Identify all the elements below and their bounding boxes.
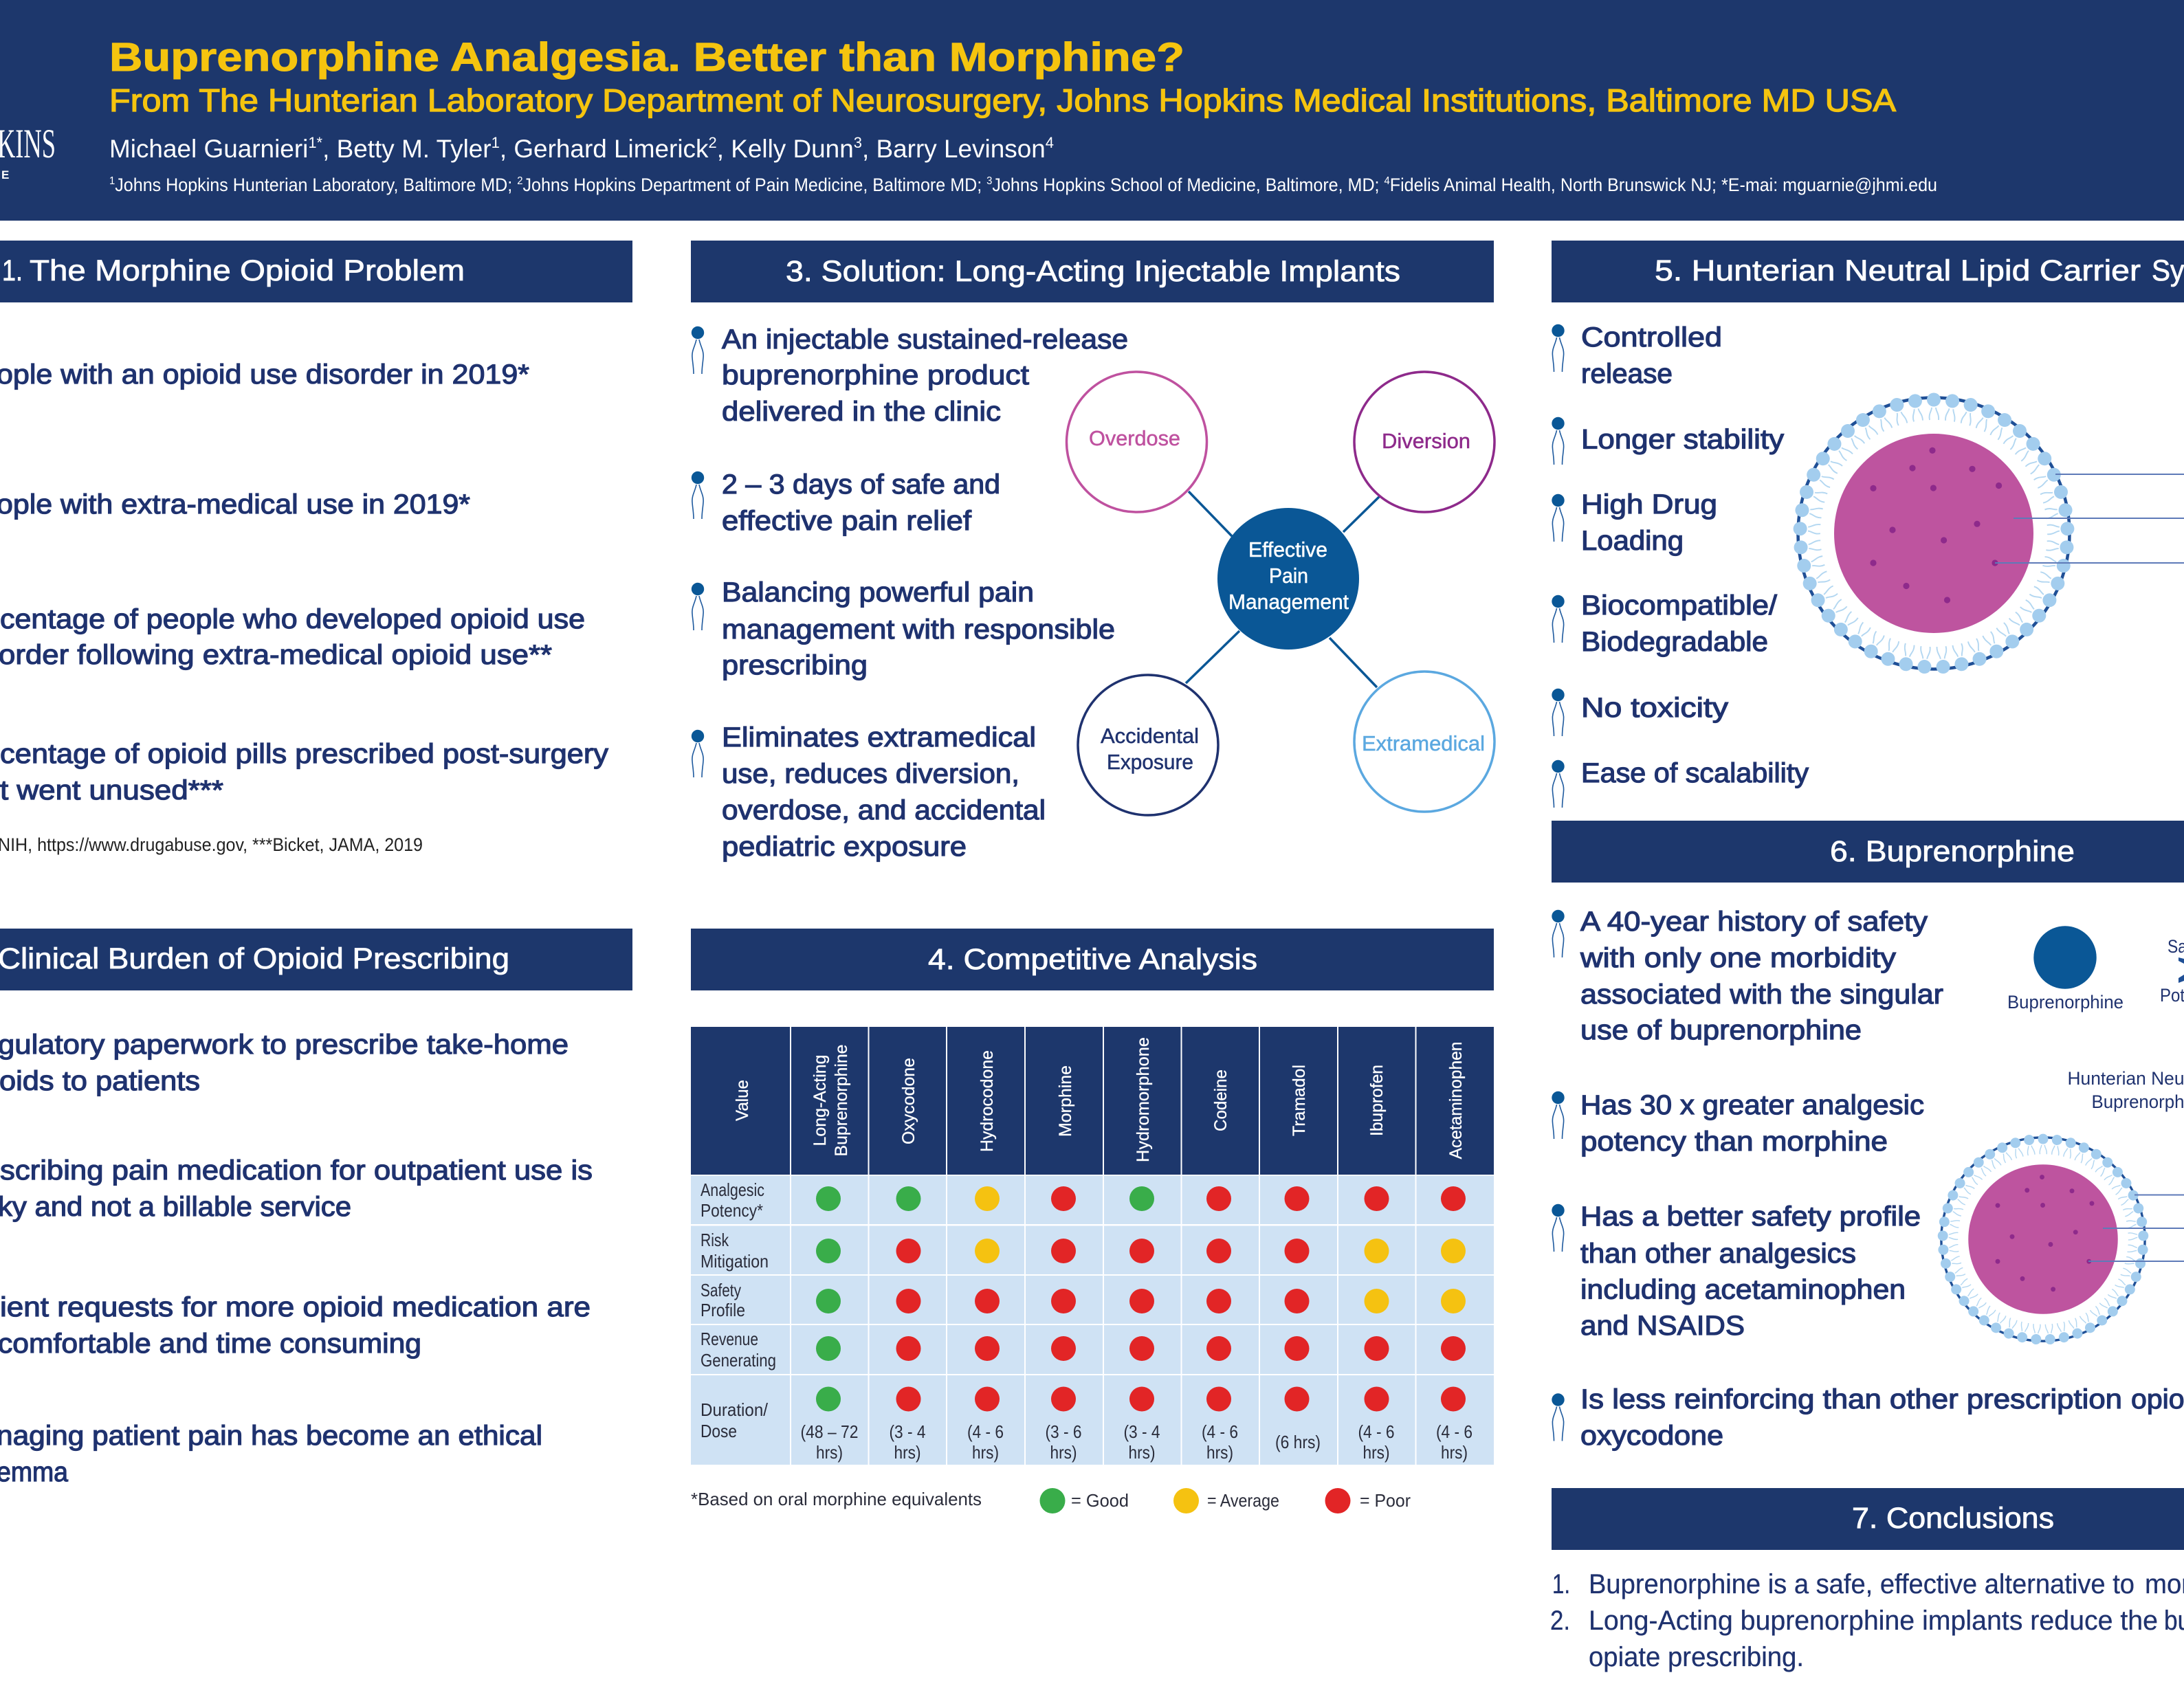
text block: sustained release: delivered in the clinic xyxy=(722,397,1001,427)
text block: section 2 burdens: naging patient pain has become an ethical xyxy=(0,1421,542,1451)
table header row: Buprenorphine xyxy=(832,1045,851,1156)
label: Buprenorphine: Buprenorphine xyxy=(2007,992,2124,1012)
icon: lipid bullet xyxy=(1552,1204,1565,1252)
heading: section 2: Clinical Burden of Opioid Prescribing xyxy=(0,942,509,975)
diagram: effective pain management hub xyxy=(1067,372,1494,815)
icon: lipid bullet xyxy=(1552,1393,1565,1441)
node: Accidental Exposure: Accidental xyxy=(1101,724,1199,748)
legend: ratings: = Average xyxy=(1207,1490,1279,1511)
icon: lipid bullet xyxy=(692,326,704,374)
text block: conclusion 2 xyxy=(1550,1606,2184,1672)
text block: eliminates extramedical use: overdose, and accidental xyxy=(722,795,1046,825)
text block: safety history: with only one morbidity xyxy=(1580,943,1896,973)
text block: section 2 burdens: ky and not a billable service xyxy=(0,1192,351,1222)
text block: safety profile: including acetaminophen xyxy=(1580,1274,1906,1305)
heading: section 5: 5. Hunterian Neutral Lipid Carrier xyxy=(1655,254,2141,287)
text block: section 2 burdens: oids to patients xyxy=(0,1066,200,1096)
text block: safety profile: than other analgesics xyxy=(1580,1239,1856,1269)
icon: buprenorphine molecule xyxy=(2033,926,2097,989)
text block: eliminates extramedical use xyxy=(722,722,1046,862)
text block: sustained release: buprenorphine product xyxy=(722,360,1029,390)
heading: section 6: 6. Buprenorphine xyxy=(1830,835,2075,868)
text block: conclusion 2: 2. xyxy=(1550,1606,1570,1636)
panel: 3. Solution: Long-Acting Injectable Implants xyxy=(691,241,1494,862)
heading: section 3: 3. Solution: Long-Acting Injectable Implants xyxy=(786,255,1400,288)
table header row: Ibuprofen xyxy=(1367,1065,1387,1136)
text block: high drug loading: High Drug xyxy=(1581,489,1717,520)
text block: safety history: A 40-year history of safety xyxy=(1580,907,1928,937)
logo: Johns Hopkins wordmark (cropped): E xyxy=(1,168,9,181)
affiliations: Fidelis Animal Health, North Brunswick NJ; *E-mai: mguarnie@jhmi.edu xyxy=(1390,175,1937,195)
icon: lipid bullet xyxy=(692,583,704,630)
panel: 5. Hunterian Neutral Lipid Carrier System xyxy=(1552,241,2184,808)
text block: safety history: use of buprenorphine xyxy=(1580,1015,1862,1045)
table header row: Morphine xyxy=(1056,1065,1075,1137)
text block: pain relief: 2 – 3 days of safe and xyxy=(722,469,1000,500)
heading: section 2 xyxy=(0,929,632,990)
row: Duration / Dose: hrs) xyxy=(1206,1442,1233,1463)
icon: lipid bullet xyxy=(1552,417,1565,465)
text block: eliminates extramedical use: pediatric exposure xyxy=(722,832,967,862)
text block: section 2 burdens: gulatory paperwork to prescribe take-home xyxy=(0,1030,569,1060)
diagram: buprenorphine lipid carrier particle xyxy=(1937,1134,2149,1345)
affiliations: Johns Hopkins Hunterian Laboratory, Baltimore MD; xyxy=(115,175,517,195)
panel: 2. Clinical Burden of Opioid Prescribing xyxy=(0,929,632,1487)
authors: 2 xyxy=(708,134,717,151)
heading: section 7: 7. Conclusions xyxy=(1852,1502,2054,1535)
heading: section 1 xyxy=(0,241,632,302)
row: Risk Mitigation: Risk xyxy=(701,1230,729,1250)
table header row: Hydrocodone xyxy=(978,1050,997,1152)
diagram: lipid carrier particle xyxy=(1793,393,2075,674)
row: Duration / Dose: (6 hrs) xyxy=(1275,1432,1321,1452)
authors: 3 xyxy=(854,134,862,151)
panel: 7. Conclusions xyxy=(1550,1488,2184,1672)
heading: section 1: The Morphine Opioid Problem xyxy=(30,254,465,287)
row: Analgesic Potency: Potency* xyxy=(701,1200,763,1221)
row: Duration / Dose: (4 - 6 xyxy=(967,1421,1004,1442)
text block: conclusion 1: Buprenorphine is a safe, effective alternative to xyxy=(1589,1569,2135,1599)
text block: balancing pain management: management with responsible xyxy=(722,614,1115,645)
poster header band xyxy=(0,0,2184,221)
row: Duration / Dose: hrs) xyxy=(972,1442,999,1463)
text block: section 1 statistics: order following extra-medical opioid use** xyxy=(0,640,552,670)
node: Extramedical xyxy=(1354,672,1494,812)
row: Safety Profile: Safety xyxy=(701,1280,741,1300)
text block: section 2 burdens: comfortable and time consuming xyxy=(0,1329,421,1359)
text block: section 2 burdens: scribing pain medication for outpatient use is xyxy=(0,1155,593,1186)
text block: analgesic potency: potency than morphine xyxy=(1580,1127,1888,1157)
authors: , Barry Levinson xyxy=(862,135,1046,163)
row: Revenue Generating: Generating xyxy=(701,1350,776,1371)
row: Duration / Dose: (4 - 6 xyxy=(1358,1421,1394,1442)
row: Analgesic Potency: Analgesic xyxy=(701,1179,764,1200)
heading: section 5 xyxy=(1552,241,2184,302)
text block: high drug loading xyxy=(1581,489,1717,556)
text block: biocompatible: Biocompatible/ xyxy=(1581,590,1778,621)
text block: section 1 statistics xyxy=(0,359,608,806)
row: Duration / Dose: (4 - 6 xyxy=(1436,1421,1472,1442)
authors: 1* xyxy=(308,134,323,151)
icon: lipid bullet xyxy=(1552,910,1565,957)
heading: section 6 xyxy=(1552,821,2184,883)
icon: lipid bullet xyxy=(692,730,704,777)
table header row: Tramadol xyxy=(1290,1065,1309,1136)
text block: safety history xyxy=(1580,907,1943,1045)
row: Duration / Dose: hrs) xyxy=(1441,1442,1468,1463)
panel: 6. Buprenorphine xyxy=(1552,821,2184,1451)
text block: section 1 references: NIH, https://www.drugabuse.gov, ***Bicket, JAMA, 2019 xyxy=(0,834,423,855)
node: Overdose: Overdose xyxy=(1089,426,1180,450)
text block: controlled release: release xyxy=(1581,359,1673,389)
table header row: Value xyxy=(733,1080,752,1121)
icon: lipid bullet xyxy=(1552,1091,1565,1139)
row: Duration / Dose: hrs) xyxy=(1129,1442,1155,1463)
icon: lipid bullet xyxy=(1552,689,1565,736)
text block: conclusion 1: 1. xyxy=(1552,1569,1570,1599)
row: Duration / Dose: (3 - 4 xyxy=(890,1421,925,1442)
heading: section 4: 4. Competitive Analysis xyxy=(928,943,1257,976)
authors: 4 xyxy=(1046,134,1054,151)
label: safety and potency arrows (cropped) xyxy=(2160,936,2184,1006)
text block: section 2 burdens xyxy=(0,1030,593,1487)
node: Effective Pain Management: Management xyxy=(1228,590,1349,614)
subtitle: From The Hunterian Laboratory Department of Neurosurgery, Johns Hopkins Medical Institutions, Baltimore MD USA xyxy=(109,82,1896,118)
affiliations: 3 xyxy=(986,175,993,187)
text block: safety profile: Has a better safety profile xyxy=(1580,1201,1921,1232)
text block: section 2 burdens: ient requests for more opioid medication are xyxy=(0,1292,591,1322)
text block: eliminates extramedical use: use, reduces diversion, xyxy=(722,759,1019,789)
heading: section 1: 1. xyxy=(2,254,23,287)
node: Effective Pain Management: Effective xyxy=(1248,537,1327,562)
authors: Michael Guarnieri xyxy=(109,135,309,163)
leader lines: lipid carrier callouts xyxy=(1995,474,2184,563)
row: Safety Profile: Profile xyxy=(701,1300,745,1320)
label: Hunterian Neutral carrier with buprenorphine: Hunterian Neu xyxy=(2068,1068,2184,1089)
node: Extramedical: Extramedical xyxy=(1362,731,1485,755)
row: Duration / Dose xyxy=(691,1375,1494,1465)
row: Duration / Dose: (3 - 4 xyxy=(1123,1421,1160,1442)
row: Risk Mitigation: Mitigation xyxy=(701,1251,769,1272)
affiliations: 2 xyxy=(517,175,523,187)
row: Revenue Generating: Revenue xyxy=(701,1329,758,1349)
row: Duration / Dose: hrs) xyxy=(894,1442,921,1463)
text block: pain relief: effective pain relief xyxy=(722,506,972,536)
row: Analgesic Potency xyxy=(691,1175,1494,1224)
icon: lipid bullet xyxy=(1552,494,1565,542)
text block: less reinforcing xyxy=(1580,1384,2184,1451)
node: Accidental Exposure: Exposure xyxy=(1107,750,1193,774)
panel: 4. Competitive Analysis xyxy=(691,929,1494,1513)
table header row: Hydromorphone xyxy=(1134,1037,1153,1162)
title: Buprenorphine Analgesia. Better than Morphine? xyxy=(109,35,1184,80)
text: longer stability: Longer stability xyxy=(1581,425,1784,455)
text block: sustained release: An injectable sustained-release xyxy=(722,324,1128,355)
text block: biocompatible: Biodegradable xyxy=(1581,627,1768,657)
table header row: Oxycodone xyxy=(899,1058,918,1144)
row: Duration / Dose: Dose xyxy=(701,1421,737,1441)
text block: less reinforcing: oxycodone xyxy=(1580,1421,1723,1451)
affiliations: Johns Hopkins Department of Pain Medicine, Baltimore MD; xyxy=(523,175,986,195)
legend: ratings: = Good xyxy=(1071,1490,1129,1511)
leader lines: buprenorphine carrier callouts xyxy=(2088,1195,2184,1261)
panel: 1. The Morphine Opioid Problem xyxy=(0,241,632,855)
text block: controlled release xyxy=(1581,322,1722,389)
text block: conclusion 2: opiate prescribing. xyxy=(1589,1642,1804,1672)
heading: section 3 xyxy=(691,241,1494,302)
row: Safety Profile xyxy=(691,1276,1494,1324)
text: ease of scalability: Ease of scalability xyxy=(1581,758,1809,788)
text block: section 1 statistics: t went unused*** xyxy=(0,775,223,806)
text block: conclusion 2: Long-Acting buprenorphine implants reduce the xyxy=(1589,1606,2158,1636)
row: Risk Mitigation xyxy=(691,1226,1494,1274)
text block: analgesic potency xyxy=(1580,1090,1924,1157)
authors: , Kelly Dunn xyxy=(717,135,854,163)
legend: ratings xyxy=(1039,1488,1411,1513)
row: Duration / Dose: hrs) xyxy=(1363,1442,1390,1463)
affiliations: Johns Hopkins School of Medicine, Baltimore, MD; xyxy=(992,175,1385,195)
node: Overdose xyxy=(1067,372,1207,512)
icon: lipid bullet xyxy=(1552,595,1565,643)
table header row xyxy=(691,1027,1494,1175)
icon: lipid bullet xyxy=(1552,760,1565,808)
row: Duration / Dose: (4 - 6 xyxy=(1202,1421,1238,1442)
row: Revenue Generating xyxy=(691,1325,1494,1374)
icon: lipid bullet xyxy=(1552,324,1565,372)
text block: eliminates extramedical use: Eliminates extramedical xyxy=(722,722,1036,753)
legend: ratings: = Poor xyxy=(1360,1490,1411,1511)
affiliations: 4 xyxy=(1385,175,1390,187)
table footnote: *Based on oral morphine equivalents xyxy=(691,1489,982,1509)
node: Diversion xyxy=(1354,372,1494,512)
node: Diversion: Diversion xyxy=(1382,429,1470,453)
text block: sustained release xyxy=(722,324,1128,427)
row: Duration / Dose: (48 – 72 xyxy=(800,1421,858,1442)
authors: 1 xyxy=(492,134,500,151)
label: Hunterian Neutral carrier with buprenorphine xyxy=(2068,1068,2184,1112)
text block: section 1 statistics: centage of people who developed opioid use xyxy=(0,604,585,634)
text block: safety history: associated with the singular xyxy=(1580,979,1943,1010)
row: Duration / Dose: hrs) xyxy=(1050,1442,1077,1463)
text block: section 1 statistics: centage of opioid pills prescribed post-surgery xyxy=(0,739,608,769)
text: no toxicity: No toxicity xyxy=(1581,693,1728,723)
text block: controlled release: Controlled xyxy=(1581,322,1722,353)
text block: high drug loading: Loading xyxy=(1581,526,1684,556)
logo: Johns Hopkins wordmark (cropped) xyxy=(0,121,56,181)
table header row: Acetaminophen xyxy=(1446,1042,1466,1159)
text block: biocompatible xyxy=(1581,590,1778,657)
icon: lipid bullet xyxy=(692,472,704,519)
row: Duration / Dose: Duration/ xyxy=(701,1399,769,1420)
logo: Johns Hopkins wordmark (cropped): KINS xyxy=(0,121,56,166)
text block: pain relief xyxy=(722,469,1000,536)
table header row: Long-Acting xyxy=(810,1054,830,1146)
row: Duration / Dose: (3 - 6 xyxy=(1045,1421,1082,1442)
authors: , Gerhard Limerick xyxy=(500,135,709,163)
authors: , Betty M. Tyler xyxy=(322,135,492,163)
heading: section 4 xyxy=(691,929,1494,990)
text block: balancing pain management: Balancing powerful pain xyxy=(722,577,1034,608)
text block: less reinforcing: Is less reinforcing than other prescription xyxy=(1580,1384,2122,1415)
node: Accidental Exposure xyxy=(1078,675,1218,815)
affiliations: 1 xyxy=(109,175,115,187)
node: Effective Pain Management: Pain xyxy=(1269,564,1308,588)
row: Duration / Dose: hrs) xyxy=(816,1442,843,1463)
table: competitive analysis xyxy=(691,1027,1494,1465)
text block: safety profile: and NSAIDS xyxy=(1580,1311,1745,1341)
text block: balancing pain management xyxy=(722,577,1115,680)
text block: section 1 statistics: ople with extra-medical use in 2019* xyxy=(0,489,470,520)
text block: section 1 statistics: ople with an opioid use disorder in 2019* xyxy=(0,359,529,390)
text block: analgesic potency: Has 30 x greater analgesic xyxy=(1580,1090,1924,1120)
table header row: Codeine xyxy=(1211,1069,1231,1131)
text block: safety profile xyxy=(1580,1201,1921,1341)
node: Effective Pain Management xyxy=(1217,508,1359,650)
heading: section 7 xyxy=(1552,1488,2184,1550)
text block: balancing pain management: prescribing xyxy=(722,650,868,680)
